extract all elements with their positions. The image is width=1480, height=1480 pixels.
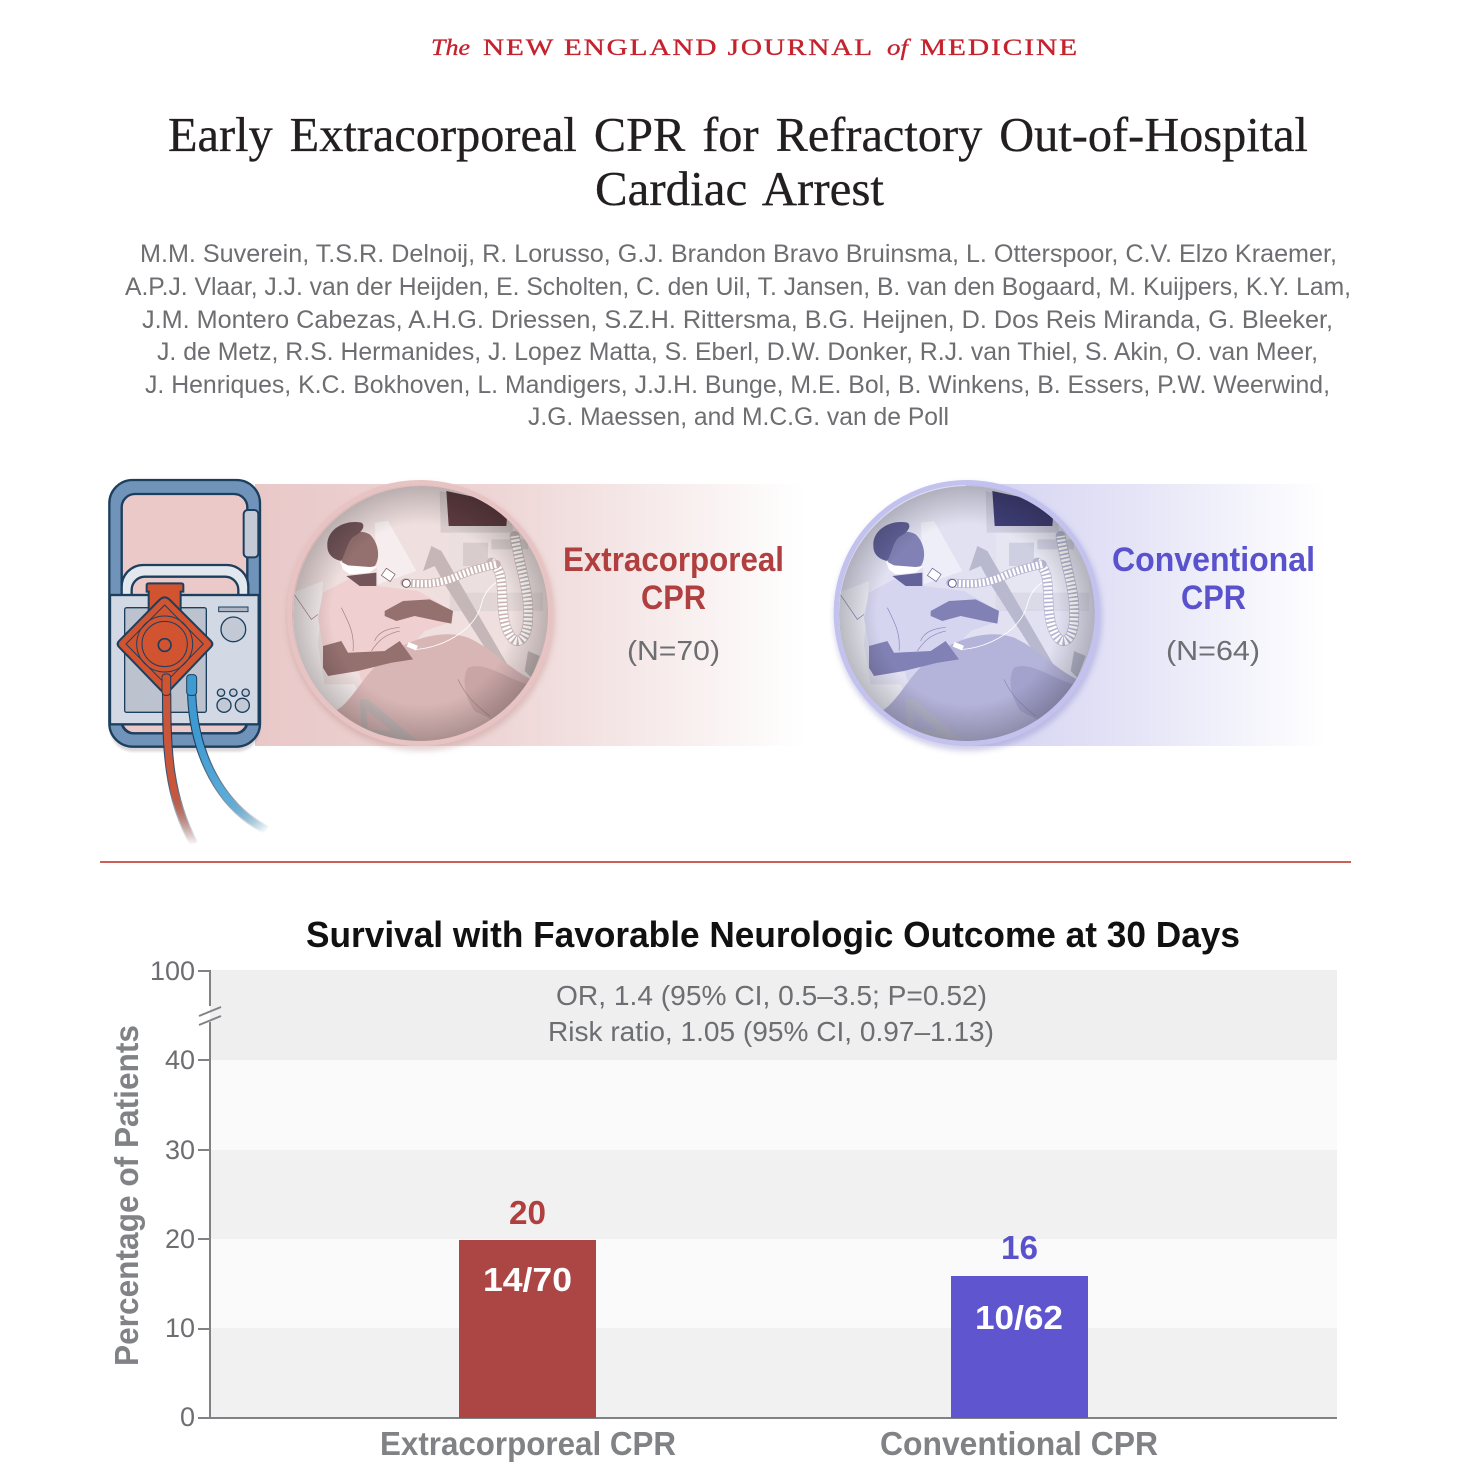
bar: extracorporeal CPR: 20 [509,1194,546,1231]
x axis labels: Conventional CPR [880,1425,1158,1462]
authors: A.P.J. Vlaar, J.J. van der Heijden, E. Scholten, C. den Uil, T. Jansen, B. van den Bogaard, M. Kuijpers, K.Y. Lam, [125,273,1351,301]
y axis tick labels: 100 [150,956,195,986]
title: Cardiac Arrest [595,161,884,216]
y axis tick labels: 0 [180,1402,195,1432]
illustration: patient in bed, pink [287,481,555,751]
divider line [100,861,1351,863]
bar: conventional CPR: 16 [1001,1229,1038,1266]
label: extracorporeal CPR, N=70: CPR [641,579,706,617]
journal masthead: The [431,35,470,60]
journal masthead: MEDICINE [920,35,1079,60]
label: conventional CPR, N=64 [1112,541,1315,666]
y axis title: Percentage of Patients [108,1025,145,1366]
plot bands [210,970,1337,1418]
bar: extracorporeal CPR: 14/70 [483,1261,572,1298]
bar: conventional CPR [951,1229,1088,1418]
panel: extracorporeal CPR group [255,481,805,751]
y axis tick labels: 40 [165,1045,195,1075]
statistics text [548,980,994,1047]
journal masthead [431,35,1079,60]
label: conventional CPR, N=64: (N=64) [1166,635,1260,666]
statistics text: Risk ratio, 1.05 (95% CI, 0.97–1.13) [548,1016,994,1047]
journal masthead: NEW ENGLAND JOURNAL [483,35,874,60]
authors: M.M. Suverein, T.S.R. Delnoij, R. Lorusso, G.J. Brandon Bravo Bruinsma, L. Otterspoor, C.V. Elzo Kraemer, [140,240,1337,268]
journal masthead: of [887,35,912,60]
title: Early Extracorporeal CPR for Refractory Out-of-Hospital [168,107,1308,162]
label: extracorporeal CPR, N=70: Extracorporeal [563,541,784,579]
illustration: patient in bed, lavender [834,481,1102,751]
y axis tick labels: 20 [165,1224,195,1254]
authors [125,240,1351,431]
authors: J. Henriques, K.C. Bokhoven, L. Mandigers, J.J.H. Bunge, M.E. Bol, B. Winkens, B. Essers, P.W. Weerwind, [145,371,1330,399]
bar chart [108,956,1337,1462]
label: conventional CPR, N=64: Conventional [1112,541,1315,579]
panel: conventional CPR group [834,481,1326,751]
authors: J.G. Maessen, and M.C.G. van de Poll [528,403,949,431]
title [168,107,1308,216]
x axis labels [380,1425,1158,1462]
y axis tick labels [150,956,195,1432]
chart title: Survival with Favorable Neurologic Outcome at 30 Days [306,914,1240,955]
bar: extracorporeal CPR [459,1194,596,1418]
icon: ECMO machine with tubes [109,480,267,844]
lavender gradient band [966,484,1326,746]
pink gradient band [255,484,805,746]
label: extracorporeal CPR, N=70 [563,541,784,666]
authors: J. de Metz, R.S. Hermanides, J. Lopez Matta, S. Eberl, D.W. Donker, R.J. van Thiel, S. Akin, O. van Meer, [157,338,1318,366]
x axis labels: Extracorporeal CPR [380,1425,676,1462]
y axis tick labels: 10 [165,1313,195,1343]
y axis tick labels: 30 [165,1135,195,1165]
label: extracorporeal CPR, N=70: (N=70) [627,635,720,666]
bar: conventional CPR: 10/62 [975,1299,1063,1336]
statistics text: OR, 1.4 (95% CI, 0.5–3.5; P=0.52) [556,980,987,1011]
authors: J.M. Montero Cabezas, A.H.G. Driessen, S.Z.H. Rittersma, B.G. Heijnen, D. Dos Reis Miranda, G. Bleeker, [142,306,1333,334]
label: conventional CPR, N=64: CPR [1181,579,1246,617]
y axis [198,971,1337,1418]
